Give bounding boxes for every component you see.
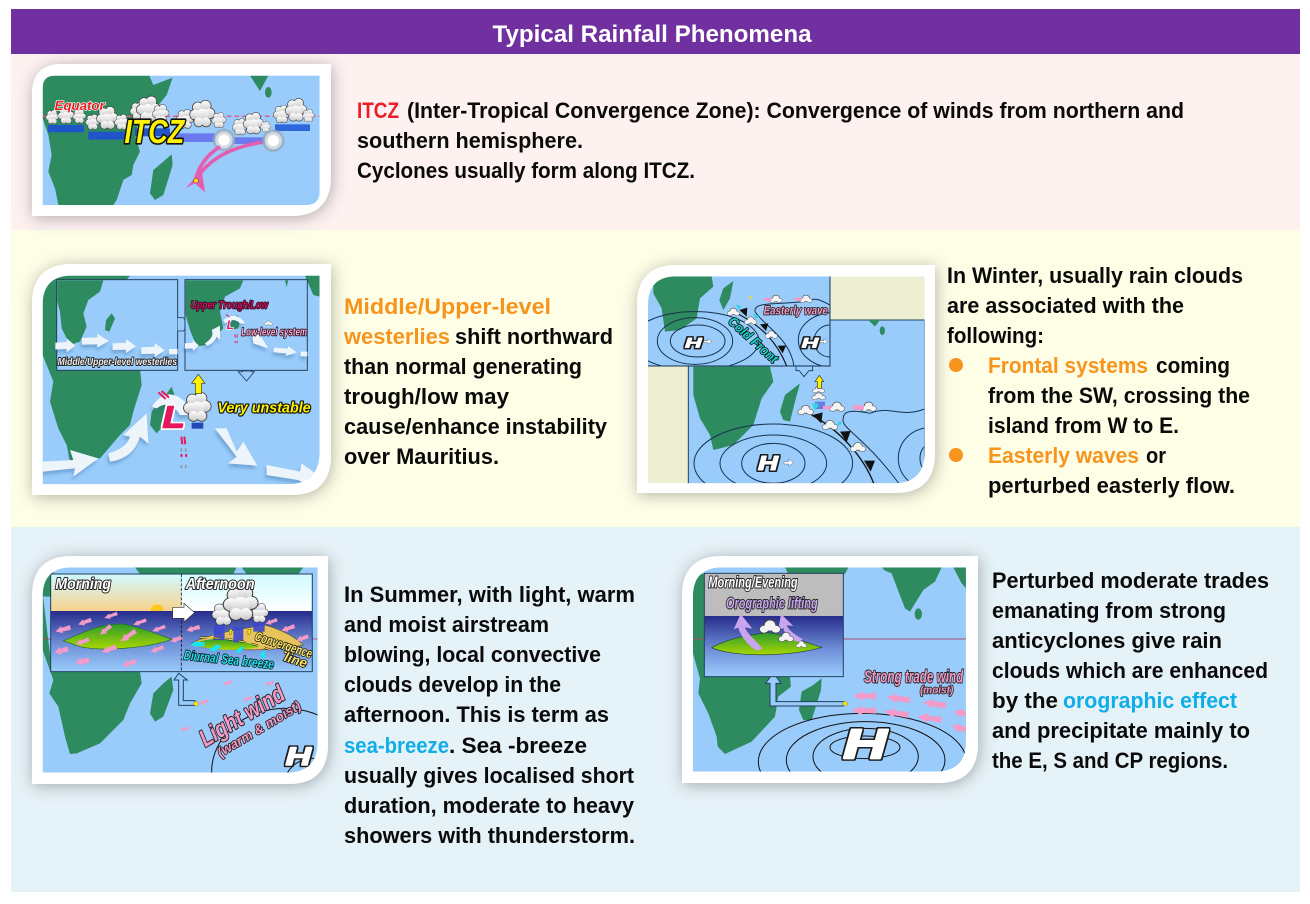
text: orographic description: by the [992,688,1058,713]
text: orographic description: orographic effect [1063,688,1238,713]
inset: morning and afternoon: Convergence [253,629,314,661]
text: westerlies description: westerlies [343,324,450,349]
map figure: ITCZ: Equator [55,99,106,113]
text: winter description: Frontal systems [988,353,1148,378]
text: westerlies description: trough/low may [344,384,510,409]
inset: cold front and easterly wave [648,276,830,366]
text: winter description [947,263,1250,498]
map figure: summer sea breeze: H [286,744,313,771]
text: summer sea breeze description: showers with thunderstorm. [344,823,635,848]
inset: orographic lifting: Morning/Evening [708,575,798,592]
text: orographic description [992,568,1269,773]
text: winter description: coming [1156,353,1230,378]
text: ITCZ description [357,98,1184,183]
text: orographic description: clouds which are enhanced [992,658,1268,683]
map figure: middle/upper-level westerlies: Very unstable [217,401,311,417]
panel: ITCZ background [11,54,1300,230]
text: westerlies description: than normal generating [344,354,582,379]
map figure: summer sea breeze: Light wind [194,680,291,752]
panel: westerlies and winter systems background [11,230,1300,527]
inset: shifted trough [185,280,307,370]
text: westerlies description: cause/enhance instability [344,414,608,439]
title banner: Typical Rainfall Phenomena [492,21,812,48]
text: westerlies description: Middle/Upper-level [344,294,551,319]
title banner [11,9,1300,54]
map figure: orographic effect: (moist) [920,684,953,696]
inset: cold front and easterly wave: H [802,335,820,351]
text: summer sea breeze description: duration, moderate to heavy [344,793,635,818]
text: westerlies description: over Mauritius. [344,444,499,469]
main weather map [688,320,925,484]
map figure: winter frontal systems [631,265,962,503]
text: westerlies description [343,294,613,469]
text: summer sea breeze description: In Summer, with light, warm [344,582,635,607]
map figure: ITCZ: ITCZ [124,114,186,151]
map figure: middle/upper-level westerlies: L [163,401,185,435]
text: summer sea breeze description: and moist airstream [344,612,549,637]
inset: orographic lifting [704,573,843,677]
text: winter description: are associated with the [947,293,1184,318]
map figure: summer sea breeze [24,548,338,796]
panel: summer and trades background [11,527,1300,892]
text: orographic description: anticyclones give rain [992,628,1222,653]
inset: morning and afternoon: Morning [55,576,111,593]
text: orographic description: and precipitate mainly to [992,718,1250,743]
inset: morning and afternoon: line [282,649,310,671]
inset: orographic lifting: Orographic lifting [726,596,818,613]
inset: morning and afternoon: Afternoon [185,576,255,593]
text: summer sea breeze description: blowing, local convective [344,642,601,667]
text: summer sea breeze description: usually gives localised short [344,763,635,788]
text: ITCZ description: (Inter-Tropical Convergence Zone): Convergence of winds from northern and [407,98,1184,123]
map figure: summer sea breeze: (warm & moist) [214,698,304,760]
text: summer sea breeze description [344,582,635,848]
text: ITCZ description: southern hemisphere. [357,128,583,153]
inset: shifted trough: Upper Trough/Low [191,299,269,311]
text: summer sea breeze description: afternoon. This is term as [344,702,609,727]
text: summer sea breeze description: . Sea -breeze [449,733,587,758]
text: winter description: Easterly waves [988,443,1139,468]
inset: cold front and easterly wave: H [685,335,703,351]
inset: normal westerlies: Middle/Upper-level westerlies [58,357,177,368]
text: ITCZ description: ITCZ [357,98,399,123]
inset: morning and afternoon: Diurnal Sea breeze [183,647,275,672]
text: winter description: perturbed easterly flow. [988,473,1235,498]
map figure: middle/upper-level westerlies [32,264,331,495]
text: summer sea breeze description: clouds develop in the [344,672,561,697]
text: orographic description: emanating from strong [992,598,1226,623]
text: winter description: or [1146,443,1166,468]
text: orographic description: Perturbed moderate trades [992,568,1269,593]
text: orographic description: the E, S and CP regions. [992,748,1228,773]
text: ITCZ description: Cyclones usually form along ITCZ. [357,158,695,183]
inset: morning and afternoon [51,574,314,672]
text: winter description: from the SW, crossing the [988,383,1250,408]
inset: cold front and easterly wave: Cold Front [725,314,782,366]
inset: shifted trough: Low-level system [241,326,307,338]
text: winter description: In Winter, usually rain clouds [947,263,1243,288]
map figure: orographic effect [682,556,978,810]
text: summer sea breeze description: sea-breeze [344,733,449,758]
inset: normal westerlies [55,280,178,370]
main weather map: H [758,452,779,475]
text: winter description: following: [947,323,1044,348]
map figure: orographic effect: H [843,720,889,767]
inset: cold front and easterly wave: Easterly wave [764,304,828,317]
map figure: ITCZ [32,64,331,216]
text: winter description: island from W to E. [988,413,1179,438]
text: westerlies description: shift northward [455,324,613,349]
map figure: orographic effect: Strong trade wind [864,667,964,687]
inset: shifted trough: L [227,318,234,332]
